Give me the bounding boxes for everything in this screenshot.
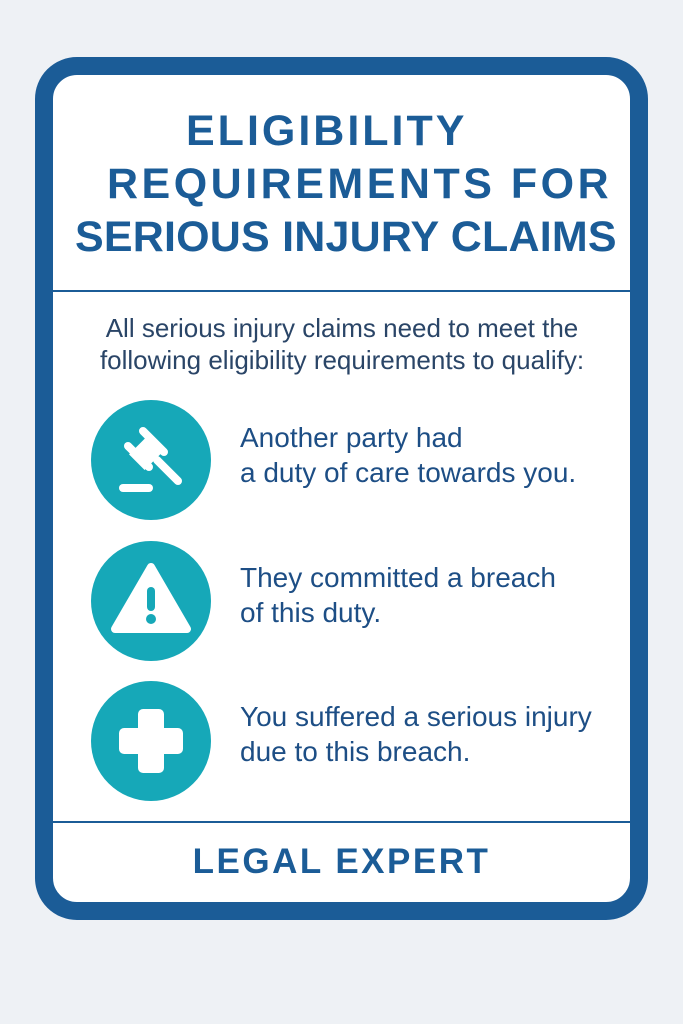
card (35, 57, 648, 920)
footer: LEGAL EXPERT (193, 842, 490, 881)
icon: gavel (91, 400, 211, 520)
icon: warning (91, 541, 211, 661)
item 2 text: of this duty. (240, 597, 381, 628)
item 2 text: They committed a breach (240, 562, 556, 593)
intro text (100, 313, 584, 375)
intro text: following eligibility requirements to qualify: (100, 345, 584, 375)
item 1 text: a duty of care towards you. (240, 457, 576, 488)
item 3 text: due to this breach. (240, 736, 470, 767)
title: SERIOUS INJURY CLAIMS (75, 213, 617, 261)
item 2 text (240, 562, 556, 628)
title (75, 107, 617, 261)
item 1 text: Another party had (240, 422, 463, 453)
intro text: All serious injury claims need to meet the (106, 313, 578, 343)
title: REQUIREMENTS FOR (107, 160, 612, 208)
title: ELIGIBILITY (186, 107, 467, 155)
item 3 text: You suffered a serious injury (240, 701, 592, 732)
item 3 text (240, 701, 592, 767)
item 1 text (240, 422, 576, 488)
icon: cross (91, 681, 211, 801)
